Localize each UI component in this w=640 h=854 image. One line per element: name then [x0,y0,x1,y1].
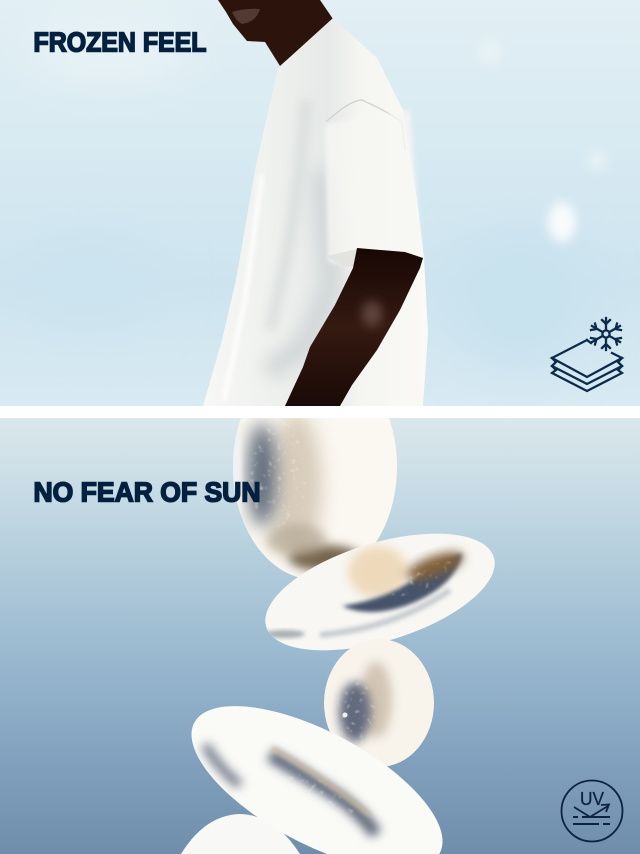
heading: no fear of sun: NO FEAR OF SUN [34,476,260,507]
model neck and chin [218,0,333,66]
icon: uv protection [562,780,622,842]
stone 3 [324,639,434,767]
stone 5 [181,814,300,854]
gradient background [0,418,640,854]
sky background [0,0,640,406]
panel: frozen feel [0,0,640,406]
divider band [0,406,640,418]
bokeh highlight [486,48,606,245]
white t-shirt [203,18,428,406]
stone 1 [231,410,397,580]
icon: layers with snowflake [552,318,622,391]
heading: frozen feel: FROZEN FEEL [34,26,206,57]
stone 4 [191,706,443,854]
model arm [285,248,423,406]
stone 2 [265,534,495,650]
panel: no fear of sun [0,410,640,854]
lips [232,9,260,24]
icon: uv protection: UV [580,789,604,809]
